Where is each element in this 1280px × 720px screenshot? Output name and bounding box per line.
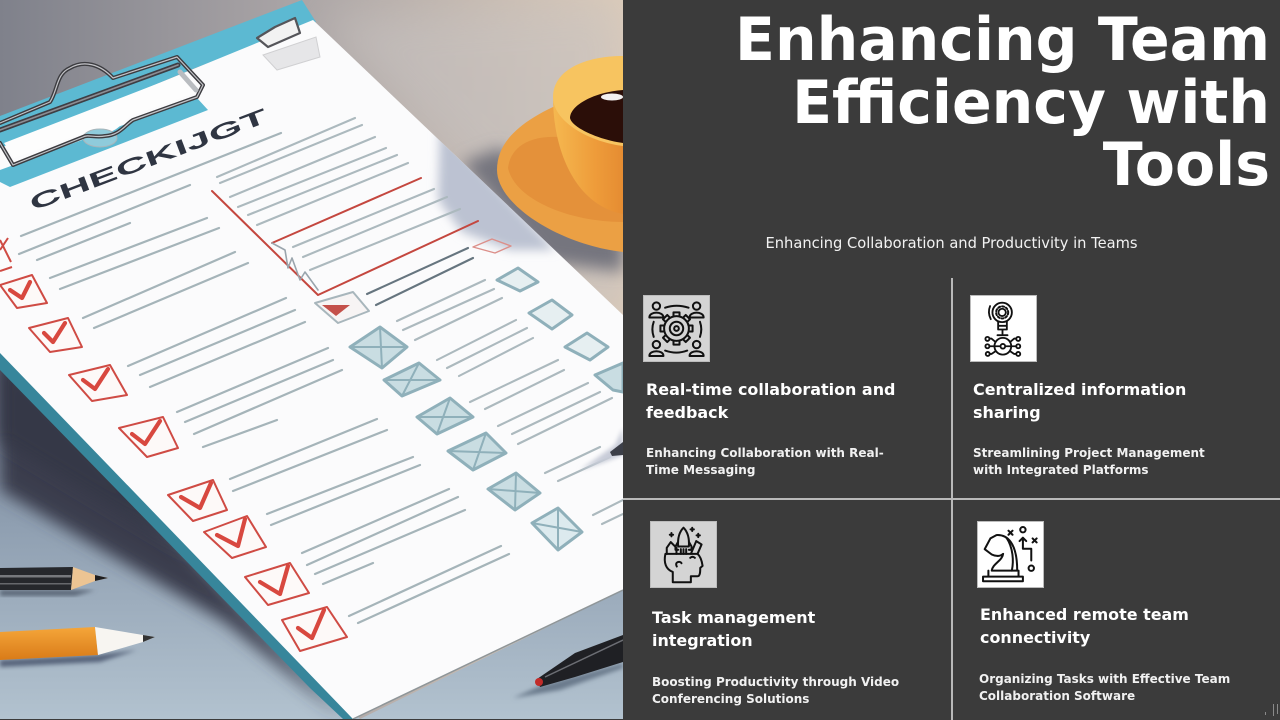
- left column text lines: [19, 133, 509, 623]
- corner mark: [1265, 704, 1278, 716]
- description: Streamlining Project Management: [973, 446, 1205, 460]
- heading: [646, 380, 895, 422]
- heading: integration: [652, 631, 753, 650]
- title: Enhancing Team: [735, 5, 1270, 75]
- checklist heading: CHECKIJGT: [27, 105, 271, 216]
- icon: head with ideas: [650, 521, 717, 588]
- icon: light bulb and network: [970, 295, 1037, 362]
- subtitle: Enhancing Collaboration and Productivity in Teams: [766, 235, 1138, 252]
- heading: [652, 608, 815, 650]
- red bracket lines: [212, 178, 478, 295]
- title: Efficiency with: [792, 68, 1270, 138]
- heading: Real-time collaboration and: [646, 380, 895, 399]
- description: Enhancing Collaboration with Real-: [646, 446, 884, 460]
- icon: team around gear: [643, 295, 710, 362]
- description: Boosting Productivity through Video: [652, 675, 899, 689]
- description: with Integrated Platforms: [973, 463, 1149, 477]
- panel: centralized information: [970, 295, 1205, 477]
- heading: sharing: [973, 403, 1041, 422]
- pen tip at right edge: [580, 428, 623, 470]
- description: [646, 446, 884, 477]
- small clip and tab: [257, 18, 320, 70]
- heading: connectivity: [980, 628, 1090, 647]
- description: [973, 446, 1205, 477]
- illustration: clipboard checklist on a desk: [0, 0, 623, 719]
- red check boxes: [0, 238, 511, 651]
- heading: [980, 605, 1189, 647]
- grid divider: vertical: [951, 278, 953, 720]
- heading: [973, 380, 1186, 422]
- clipboard board: [0, 0, 353, 719]
- heading: feedback: [646, 403, 728, 422]
- icon: chess knight strategy: [977, 521, 1044, 588]
- metal clip: [0, 57, 203, 165]
- description: [979, 672, 1230, 703]
- right column text lines: [217, 118, 623, 524]
- description: Conferencing Solutions: [652, 692, 809, 706]
- title: Tools: [1103, 130, 1270, 200]
- description: Time Messaging: [646, 463, 755, 477]
- black pencil: [0, 567, 108, 596]
- black pen: [513, 635, 623, 698]
- panel: task management: [650, 521, 899, 706]
- blue envelope check boxes: [315, 268, 623, 550]
- heading: Task management: [652, 608, 815, 627]
- description: Organizing Tasks with Effective Team: [979, 672, 1230, 686]
- description: Collaboration Software: [979, 689, 1135, 703]
- heading: Enhanced remote team: [980, 605, 1189, 624]
- grid divider: horizontal: [623, 498, 1280, 500]
- desk background: [0, 0, 623, 719]
- description: [652, 675, 899, 706]
- red check marks: [10, 282, 324, 638]
- coffee cup and saucer: [462, 56, 623, 272]
- panel: real-time collaboration: [643, 295, 895, 477]
- panel: remote connectivity: [977, 521, 1230, 703]
- orange pencil: [0, 627, 155, 667]
- heading: Centralized information: [973, 380, 1186, 399]
- checklist paper: [0, 20, 623, 719]
- title: [735, 5, 1270, 200]
